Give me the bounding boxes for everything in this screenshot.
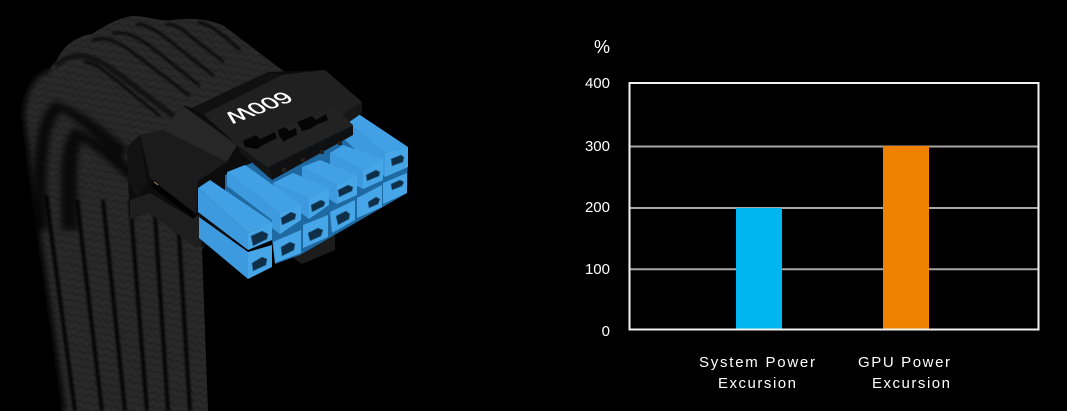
latch plate bbox=[237, 107, 353, 180]
plot frame bbox=[630, 83, 1038, 330]
vertical separators bbox=[46, 195, 190, 411]
layer gap between rear and front bundle bbox=[56, 56, 176, 118]
illustration: connector housing bbox=[127, 70, 362, 264]
category label: System Power Excursion: System Power bbox=[699, 354, 815, 371]
latch notches bbox=[243, 114, 328, 149]
lower block bbox=[130, 193, 202, 248]
top pin 3 bbox=[273, 183, 309, 219]
category label: GPU Power Excursion: GPU Power bbox=[858, 354, 950, 371]
category label: System Power Excursion bbox=[699, 354, 815, 392]
top pin 4 bbox=[302, 167, 337, 204]
y-axis tick labels: 200 bbox=[585, 199, 610, 216]
left clip bbox=[127, 135, 147, 198]
bar: System Power Excursion 200% bbox=[736, 208, 782, 330]
category label: GPU Power Excursion: Excursion bbox=[872, 375, 950, 392]
main top face bbox=[202, 70, 362, 145]
inner arc shadows bbox=[33, 101, 128, 230]
category label: System Power Excursion: Excursion bbox=[718, 375, 796, 392]
lower row pins bbox=[383, 173, 407, 204]
top pin 6 bbox=[345, 120, 385, 177]
category label: GPU Power Excursion bbox=[858, 354, 950, 392]
y-axis tick labels bbox=[585, 75, 610, 340]
latch tab under pins bbox=[293, 235, 335, 264]
cable separators: rear bundle bbox=[84, 22, 240, 116]
dark body backing bbox=[127, 70, 362, 247]
illustration: sleeved cable bundle bbox=[21, 16, 284, 411]
y-axis tick labels: 300 bbox=[585, 138, 610, 155]
top ridge bar bbox=[192, 72, 282, 115]
illustration: blue connector pins bbox=[198, 113, 408, 279]
near lower pin bbox=[199, 217, 248, 279]
near upper pin bbox=[198, 188, 248, 250]
upper sloped face bbox=[163, 105, 237, 162]
y-axis unit: % bbox=[594, 37, 610, 57]
chart: power excursion bars bbox=[585, 37, 1038, 392]
y-axis tick labels: 0 bbox=[602, 323, 610, 340]
illustration: connector top with 600W label bbox=[192, 70, 362, 180]
y-axis tick labels: 400 bbox=[585, 75, 610, 92]
grid lines bbox=[630, 146, 1038, 269]
left edge falloff bbox=[21, 68, 62, 411]
top pin 5 bbox=[330, 153, 363, 189]
slit bbox=[150, 181, 196, 219]
y-axis tick labels: 100 bbox=[585, 261, 610, 278]
side face bbox=[140, 130, 227, 214]
rear blue backing bbox=[225, 120, 408, 264]
label: 600W: 600W bbox=[217, 88, 298, 126]
top pin 2 bbox=[227, 172, 280, 234]
pin socket holes bbox=[251, 155, 404, 271]
bar: GPU Power Excursion 300% bbox=[883, 146, 929, 330]
